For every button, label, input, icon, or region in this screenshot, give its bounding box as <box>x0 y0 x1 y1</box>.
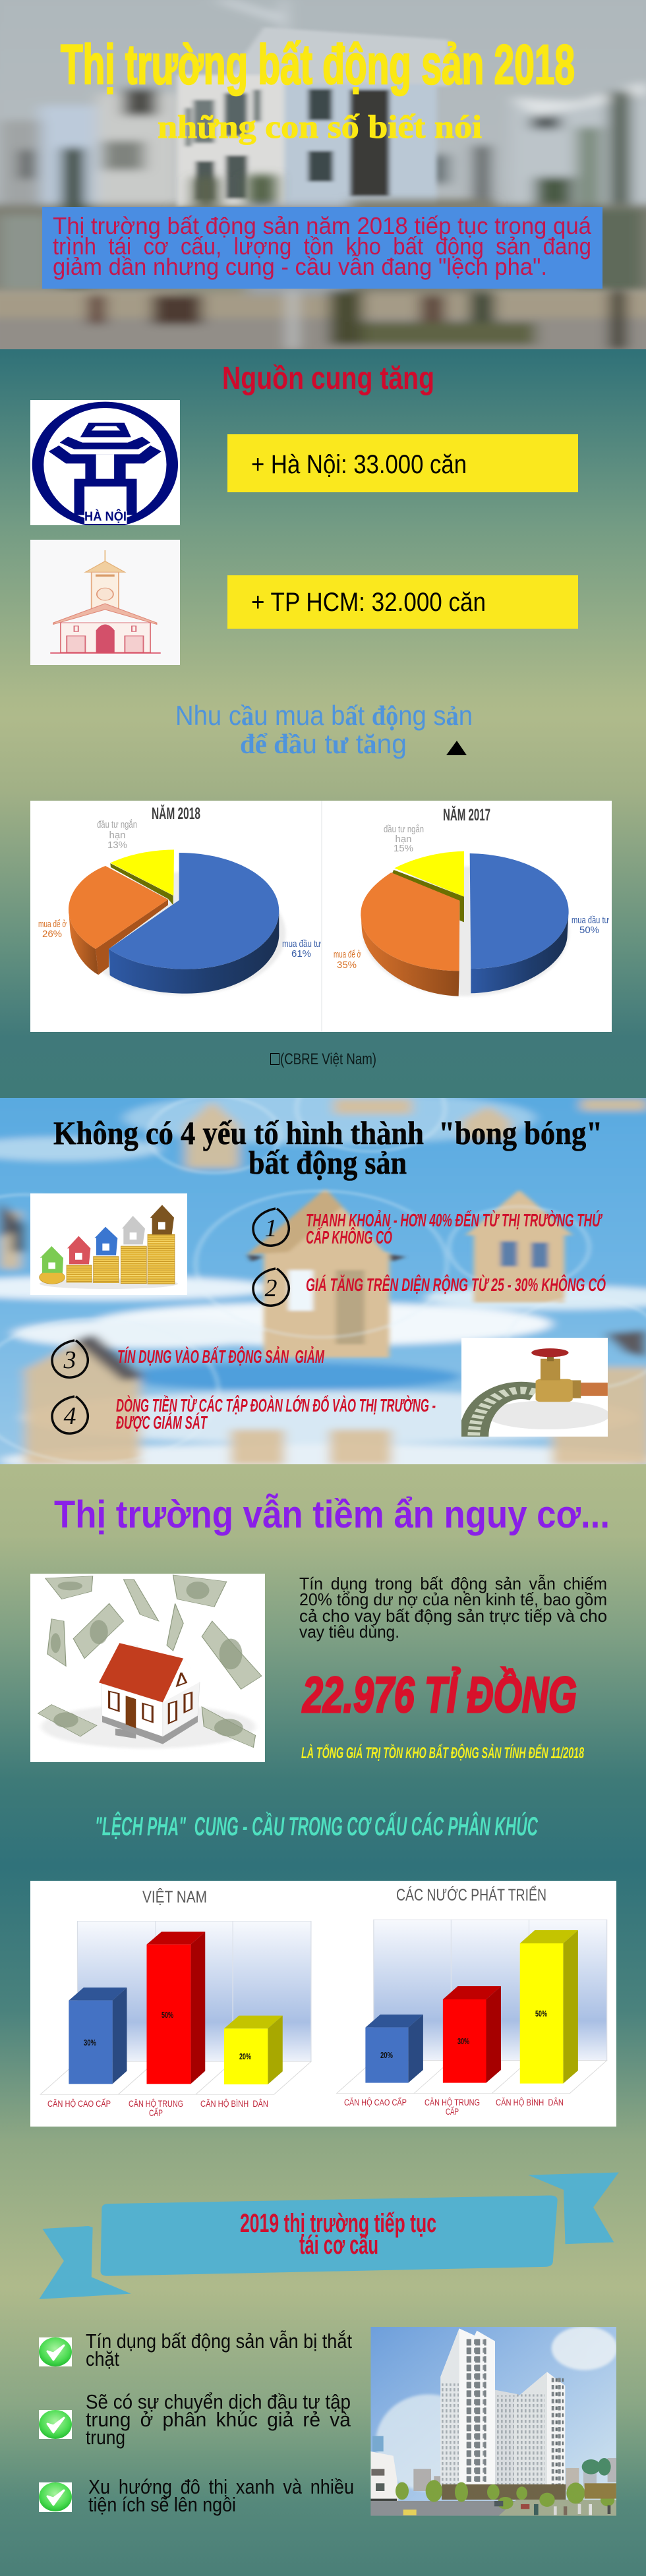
pie chart 2017: mua đầu tư <box>572 915 609 926</box>
pie chart 2017: mua để ở <box>334 949 361 960</box>
bar chart: developed countries: 50% <box>535 2009 547 2018</box>
pie chart 2017: NĂM 2017 <box>443 805 490 824</box>
image: apartment towers <box>370 2326 618 2516</box>
bar chart: developed countries <box>337 1885 607 2117</box>
panel: pie charts <box>30 801 612 1032</box>
factor 4: DÒNG TIỀN TỪ CÁC TẬP ĐOÀN LỚN ĐỔ VÀO THỊ TRƯỜNG - <box>116 1395 436 1416</box>
ribbon banner: 2019 outlook: tái cơ cấu <box>299 2231 378 2260</box>
page background: lower sections gradient <box>0 1464 646 2576</box>
bar chart: Vietnam: 50% <box>162 2010 173 2020</box>
ribbon banner: 2019 outlook: 2019 thị trường tiếp tục <box>240 2209 436 2238</box>
number badge 2: 2 <box>265 1274 277 1302</box>
number badge 2 <box>253 1269 289 1305</box>
pie chart 2017: hạn <box>395 834 412 845</box>
outlook item 2: Sẽ có sự chuyển dịch đầu tư tập <box>86 2390 351 2413</box>
subtitle: những con số biết nói <box>158 108 482 145</box>
label: Hanoi supply: + Hà Nội: 33.000 căn <box>251 450 467 479</box>
intro text box: Thị trường bất động sản năm 2018 tiếp tục trong quá <box>53 212 592 239</box>
bar chart: Vietnam: CĂN HỘ CAO CẤP <box>47 2098 111 2109</box>
icon: check 3 <box>39 2482 72 2512</box>
intro text box: giảm dần nhưng cung - cầu vẫn đang "lệch pha". <box>53 253 547 280</box>
panel: bar charts <box>30 1881 616 2127</box>
text: credit share: cả cho vay bất động sản trực tiếp và cho <box>299 1606 607 1626</box>
label: Hanoi supply <box>227 434 578 492</box>
bar chart: Vietnam: CĂN HỘ BÌNH DÂN <box>200 2098 268 2109</box>
pie chart 2018: mua đầu tư <box>282 938 321 950</box>
icon: up triangle <box>446 741 467 755</box>
factor 2 <box>253 1269 606 1305</box>
bar chart: developed countries: CÁC NƯỚC PHÁT TRIỂN <box>396 1885 546 1904</box>
icon: check 2 <box>39 2410 72 2439</box>
pie chart 2018: 61% <box>291 948 311 959</box>
bar chart: Vietnam: 20% <box>239 2051 251 2061</box>
ribbon banner: 2019 outlook <box>39 2172 619 2299</box>
hero blurred building photo <box>0 0 646 372</box>
factor 1: CẤP KHÔNG CÓ <box>306 1226 392 1247</box>
pie chart 2017: đầu tư ngắn <box>384 824 424 835</box>
icon: Hanoi logo: HÀ NỘI <box>84 509 127 524</box>
pie chart 2017 <box>334 805 609 996</box>
number badge 3 <box>52 1340 88 1377</box>
pie chart 2018: đầu tư ngắn <box>97 819 137 830</box>
pie chart 2017: 15% <box>394 843 413 854</box>
outlook item 2 <box>39 2390 351 2449</box>
image: house with falling money <box>30 1574 265 1762</box>
factor 4 <box>52 1395 436 1433</box>
bar chart: developed countries: CĂN HỘ CAO CẤP <box>344 2097 407 2107</box>
number badge 4 <box>52 1396 88 1433</box>
pie chart 2018: 13% <box>107 840 127 851</box>
bar chart: Vietnam: 30% <box>84 2038 96 2047</box>
bar chart: developed countries: 20% <box>380 2050 393 2060</box>
icon: Hanoi logo <box>30 400 180 525</box>
intro text box: trình tái cơ cấu, lượng tồn kho bất động sản đang <box>53 233 591 260</box>
number badge 4: 4 <box>63 1402 76 1430</box>
panel: hero <box>0 0 646 372</box>
bar chart: developed countries: 30% <box>457 2036 469 2046</box>
bar chart: Vietnam: VIỆT NAM <box>142 1887 207 1906</box>
outlook item 1: Tín dụng bất động sản vẫn bị thắt <box>86 2330 352 2353</box>
outlook item 1: chặt <box>86 2347 119 2370</box>
pie chart 2018 <box>38 804 321 995</box>
number badge 1: 1 <box>265 1215 277 1242</box>
factor 3: TÍN DỤNG VÀO BẤT ĐỘNG SẢN GIẢM <box>117 1346 324 1367</box>
outlook item 3: Xu hướng đô thị xanh và nhiều <box>88 2475 354 2498</box>
bar chart: Vietnam <box>40 1887 311 2118</box>
bar chart: developed countries: CĂN HỘ BÌNH DÂN <box>496 2097 564 2107</box>
pie chart 2018: 26% <box>42 929 62 940</box>
outlook item 2: trung <box>86 2426 125 2449</box>
heading: investment demand: để đầu tư tăng <box>240 728 407 760</box>
bubble background photo <box>0 1098 646 1464</box>
icon: Ben Thanh market <box>30 540 180 665</box>
icon: check 1 <box>39 2337 72 2366</box>
bar chart: developed countries: CẤP <box>446 2106 459 2117</box>
intro text box <box>42 207 602 289</box>
heading: investment demand: Nhu cầu mua bất động sản <box>175 700 473 731</box>
source note: (CBRE Việt Nam) <box>280 1050 376 1068</box>
pie chart 2018: hạn <box>109 830 126 841</box>
bubble heading <box>53 1114 602 1181</box>
number badge 3: 3 <box>63 1346 76 1374</box>
factor 1 <box>253 1209 603 1247</box>
pie chart 2017: 50% <box>579 925 599 936</box>
text: credit share <box>299 1574 607 1642</box>
number badge 1 <box>253 1209 289 1245</box>
label: HCMC supply: + TP HCM: 32.000 căn <box>251 588 486 617</box>
text: credit share: 20% tổng dư nợ của nền kinh tế, bao gồm <box>299 1589 607 1609</box>
image: houses on coins <box>30 1193 187 1295</box>
factor 3 <box>52 1340 324 1377</box>
heading: investment demand <box>175 700 473 760</box>
text: credit share: Tín dụng trong bất động sản vẫn chiếm <box>299 1574 607 1593</box>
heading: supply increases: Nguồn cung tăng <box>222 361 434 396</box>
text: credit share: vay tiêu dùng. <box>299 1622 399 1642</box>
pie chart 2017: 35% <box>337 959 357 971</box>
outlook item 3: tiện ích sẽ lên ngôi <box>88 2493 236 2516</box>
pie chart 2018: mua để ở <box>38 919 67 930</box>
outlook item 1 <box>39 2330 352 2370</box>
factor 4: ĐƯỢC GIÁM SÁT <box>116 1412 208 1433</box>
image: money faucet <box>461 1338 610 1437</box>
bar chart: Vietnam: CĂN HỘ TRUNG <box>129 2098 183 2109</box>
panel: bubble section <box>0 1098 646 1464</box>
bar chart: developed countries: CĂN HỘ TRUNG <box>425 2097 480 2107</box>
label: HCMC supply <box>227 575 578 629</box>
bar chart: Vietnam: CẤP <box>149 2107 163 2118</box>
page background: section 2 gradient <box>0 349 646 1098</box>
pie chart 2018: NĂM 2018 <box>152 804 200 823</box>
outlook item 3 <box>39 2475 354 2516</box>
bubble heading: bất động sản <box>249 1144 407 1181</box>
outlook item 2: trung ở phân khúc giả rẻ và <box>86 2408 351 2431</box>
